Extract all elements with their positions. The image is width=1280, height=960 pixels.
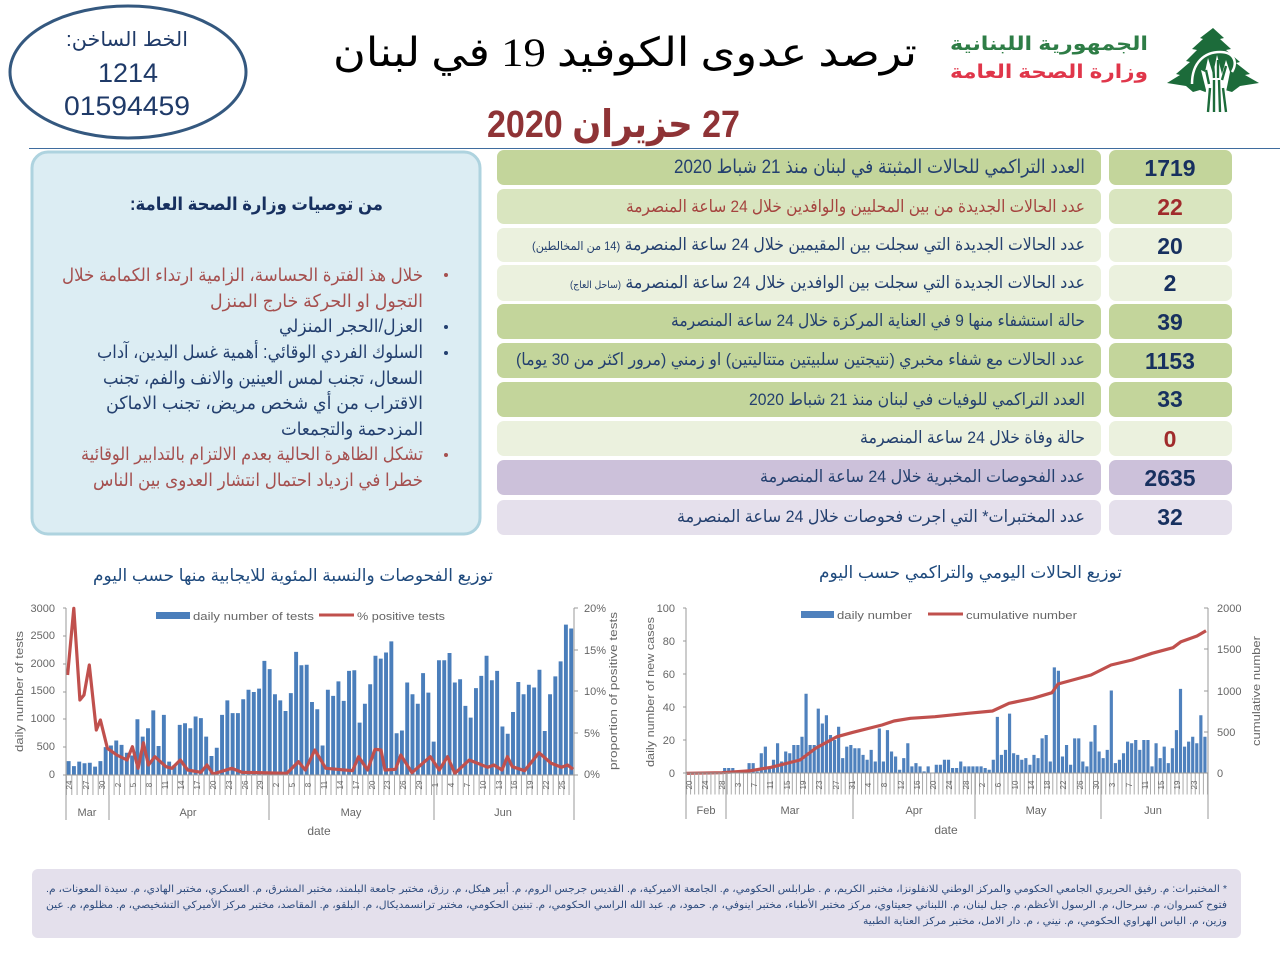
row: laboratories: عدد المختبرات* التي اجرت فحوصات خلال 24 ساعة المنصرمة [677, 507, 1085, 527]
left axis labels: 20 [663, 735, 675, 747]
recommendations heading: من توصيات وزارة الصحة العامة: [130, 194, 383, 215]
row: hospitalised [497, 304, 1232, 339]
row: new cases among arrivals: عدد الحالات الجديدة التي سجلت بين الوافدين خلال 24 ساعة المنصرمة (ساحل العاج) [570, 273, 1085, 293]
left axis labels: 100 [657, 603, 675, 615]
date labels: 11 [766, 780, 775, 789]
chart: daily tests and percent positive [14, 603, 620, 838]
left chart title: توزيع الفحوصات والنسبة المئوية للايجابية منها حسب اليوم [93, 566, 493, 586]
bullet list: المزدحمة والتجمعات [281, 419, 423, 440]
date labels: 26 [399, 780, 408, 789]
date labels: 2 [272, 782, 281, 787]
date labels: 22 [542, 780, 551, 789]
row: new cases [497, 189, 1232, 224]
row: cumulative deaths: 33 [1157, 386, 1183, 412]
bullet list: السلوك الفردي الوقائي: أهمية غسل اليدين، آداب [97, 340, 423, 363]
row: recovered: عدد الحالات مع شفاء مخبري (نتيجتين سلبيتين متتاليتين) او زمني (مرور اكثر من 30 يوما) [516, 350, 1085, 370]
left axis labels: 3000 [31, 603, 55, 615]
title: ترصد عدوى الكوفيد 19 في لبنان [333, 30, 917, 76]
row: new cases among arrivals: 2 [1164, 270, 1176, 296]
left axis labels: 2500 [31, 630, 55, 642]
month labels: Feb [697, 805, 715, 817]
axis title: proportion of positive tests: proportion of positive tests [608, 611, 620, 770]
date labels: 14 [177, 780, 186, 789]
right axis labels: 10% [584, 686, 606, 698]
date labels: 3 [1108, 782, 1117, 787]
bullet list: خطرا في ازدياد احتمال انتشار العدوى بين الناس [93, 470, 423, 491]
left axis labels: 60 [663, 669, 675, 681]
row: new cases among residents: 20 [1157, 233, 1183, 259]
date labels: 19 [1173, 780, 1182, 789]
legend: daily number [837, 610, 912, 622]
date labels: 5 [288, 782, 297, 787]
date labels: 22 [1059, 780, 1068, 789]
date labels: 25 [558, 780, 567, 789]
hotline ellipse [10, 6, 246, 138]
date labels: 26 [1076, 780, 1085, 789]
header rule [29, 148, 1280, 150]
date labels: 7 [1125, 782, 1134, 787]
row: cumulative cases [497, 150, 1232, 185]
right axis labels: 1500 [1217, 644, 1241, 656]
date labels: 2 [978, 782, 987, 787]
legend: cumulative number [966, 610, 1077, 622]
date labels: 31 [848, 780, 857, 789]
row: cumulative cases: العدد التراكمي للحالات المثبتة في لبنان منذ 21 شباط 2020 [674, 157, 1085, 178]
date labels: 18 [1043, 780, 1052, 789]
date labels: 12 [897, 780, 906, 789]
bullet list: تشكل الظاهرة الحالية بعدم الالتزام بالتدابير الوقائية [81, 444, 423, 465]
legend [801, 610, 1077, 622]
bullet list: السعال، تجنب لمس العينين والانف والفم، تجنب [103, 368, 423, 389]
right axis labels: 1000 [1217, 686, 1241, 698]
date labels: 24 [65, 780, 74, 789]
bars: daily number of cases [725, 667, 1205, 773]
legend [156, 611, 446, 623]
date labels: 29 [256, 780, 265, 789]
bars: daily number of tests [69, 625, 571, 775]
right axis labels [1217, 603, 1241, 780]
row: cumulative deaths [497, 382, 1232, 417]
date labels: 27 [82, 780, 91, 789]
date labels: 20 [368, 780, 377, 789]
month labels: May [1026, 805, 1047, 817]
date labels: 7 [463, 782, 472, 787]
panel: laboratories footnote: وزين، م. الياس الهراوي الحكومي، م. نيني ، م. دار الامل، مختبر مركز العناية الطبية [863, 916, 1227, 927]
date labels: 11 [1141, 780, 1150, 789]
date labels: 13 [495, 780, 504, 789]
bullet list: التجول او الحركة خارج المنزل [210, 291, 423, 312]
bullet list: العزل/الحجر المنزلي [279, 316, 423, 337]
date labels: 23 [815, 780, 824, 789]
row: hospitalised: 39 [1157, 309, 1183, 335]
date labels: 14 [1027, 780, 1036, 789]
date labels: 29 [415, 780, 424, 789]
row: new cases among arrivals [497, 265, 1232, 301]
row: deaths last 24h: حالة وفاة خلال 24 ساعة المنصرمة [860, 428, 1085, 447]
date heading: 27 حزيران 2020 [487, 104, 740, 146]
date labels: 20 [929, 780, 938, 789]
left axis labels: 1000 [31, 713, 55, 725]
row: new cases: 22 [1157, 194, 1183, 220]
date labels: 23 [225, 780, 234, 789]
left axis labels: 2000 [31, 658, 55, 670]
date labels: 4 [864, 782, 873, 787]
date labels: 23 [383, 780, 392, 789]
row: recovered: 1153 [1145, 348, 1195, 374]
date labels [685, 780, 1199, 789]
right axis labels [584, 603, 606, 781]
row: lab tests: 2635 [1144, 465, 1196, 491]
right axis labels: 0% [584, 769, 600, 781]
date labels: 15 [1157, 780, 1166, 789]
ministry name [950, 34, 1148, 83]
row: lab tests [497, 460, 1232, 495]
month labels [78, 807, 512, 819]
left axis labels: 0 [49, 769, 55, 781]
date labels: 20 [685, 780, 694, 789]
date labels: 26 [241, 780, 250, 789]
left axis labels: 80 [663, 636, 675, 648]
axis title: daily number of new cases: daily number of new cases [645, 616, 657, 767]
month labels: Jun [494, 807, 512, 819]
month labels: Apr [179, 807, 197, 819]
right axis labels: 15% [584, 645, 606, 657]
date labels: 30 [98, 780, 107, 789]
right axis labels: 2000 [1217, 603, 1241, 615]
bullet list: خلال هذ الفترة الحساسة، الزامية ارتداء الكمامة خلال [62, 265, 423, 286]
month labels: Apr [905, 805, 923, 817]
right axis labels: 5% [584, 728, 600, 740]
row: deaths last 24h [497, 421, 1232, 456]
date labels: 10 [1011, 780, 1020, 789]
date labels: 8 [304, 782, 313, 787]
panel: statistics table [497, 150, 1232, 535]
month labels: Jun [1144, 805, 1162, 817]
legend: daily number of tests [193, 611, 315, 623]
panel: laboratories footnote: * المختبرات: م. رفيق الحريري الجامعي الحكومي والمركز الوطني للانفلونزا، مختبر الكريم، م . طرابلس الحكومي، م. الجامعة الاميركية، م. القديس جرجس الروم، م. أبير هيكل، م. رزق، مختبر جامعة البلمند، مختبر المشرق، م. العسكري، مختبر الهادي، م. سيدة المعونات، م. [46, 882, 1227, 895]
date labels: 24 [701, 780, 710, 789]
axes [63, 608, 578, 820]
row: hospitalised: حالة استشفاء منها 9 في العناية المركزة خلال 24 ساعة المنصرمة [671, 311, 1085, 331]
row: recovered [497, 343, 1232, 378]
month labels: May [341, 807, 362, 819]
panel: recommendations [32, 152, 480, 534]
line: cumulative number [686, 631, 1206, 773]
date labels: 24 [945, 780, 954, 789]
date labels: 10 [479, 780, 488, 789]
row: lab tests: عدد الفحوصات المخبرية خلال 24 ساعة المنصرمة [760, 467, 1085, 486]
bullet list [62, 265, 448, 491]
hotline ellipse: الخط الساخن: [66, 29, 188, 51]
date labels: 19 [799, 780, 808, 789]
left axis labels [31, 603, 55, 781]
right axis labels: 20% [584, 603, 606, 615]
row: cumulative deaths: العدد التراكمي للوفيات في لبنان منذ 21 شباط 2020 [749, 390, 1085, 410]
row: laboratories [497, 500, 1232, 535]
row: new cases among residents: عدد الحالات الجديدة التي سجلت بين المقيمين خلال 24 ساعة المنصرمة (14 من المخالطين) [532, 235, 1085, 255]
left axis labels: 500 [37, 741, 55, 753]
line: percent positive [68, 608, 573, 774]
row: cumulative cases: 1719 [1144, 155, 1196, 181]
month labels: Mar [78, 807, 97, 819]
date labels [65, 780, 567, 789]
date labels: 19 [526, 780, 535, 789]
date labels: 8 [880, 782, 889, 787]
ministry name: وزارة الصحة العامة [950, 62, 1148, 83]
date labels: 6 [994, 782, 1003, 787]
date labels: 28 [962, 780, 971, 789]
axis title: cumulative number: cumulative number [1251, 636, 1263, 746]
hotline ellipse: 01594459 [64, 91, 190, 121]
month labels: Mar [781, 805, 800, 817]
panel: laboratories footnote: فتوح كسروان، م. سرحال، م. الرسول الأعظم، م. جبل لبنان، م. اللبناني جعيتاوي، مركز مختبر الأطباء، مختبر اينوفي، م. حمود، م. عبد الله الراسي الحكومي، م. تبنين الحكومي، مختبر ترانسمديكال، م. البلقو، م. المقاصد، مختبر مركز الأميركي التشخيصي، م. مظلوم، م. عين [46, 898, 1227, 911]
row: deaths last 24h: 0 [1164, 426, 1176, 452]
date labels: 30 [1092, 780, 1101, 789]
date labels: 14 [336, 780, 345, 789]
left axis labels: 0 [669, 768, 675, 780]
x axis title: date [934, 823, 958, 837]
date labels: 8 [145, 782, 154, 787]
x axis title: date [307, 824, 331, 838]
date labels: 20 [209, 780, 218, 789]
bullet list: الاقتراب من أي شخص مريض، تجنب الاماكن [106, 391, 423, 414]
date labels: 5 [129, 782, 138, 787]
month labels [697, 805, 1162, 817]
date labels: 23 [1190, 780, 1199, 789]
left axis labels: 40 [663, 702, 675, 714]
date labels: 17 [193, 780, 202, 789]
row: new cases among residents [497, 228, 1232, 262]
left axis labels: 1500 [31, 685, 55, 697]
date labels: 1 [431, 782, 440, 787]
date labels: 3 [734, 782, 743, 787]
right axis labels: 0 [1217, 768, 1223, 780]
icon: cedar tree logo [1167, 28, 1259, 112]
date labels: 15 [783, 780, 792, 789]
legend: % positive tests [357, 611, 446, 623]
date labels: 27 [832, 780, 841, 789]
date labels: 4 [447, 782, 456, 787]
axis title: daily number of tests: daily number of tests [14, 630, 26, 752]
date labels: 11 [320, 780, 329, 789]
hotline ellipse: 1214 [98, 58, 158, 88]
date labels: 28 [718, 780, 727, 789]
date labels: 2 [114, 782, 123, 787]
date labels: 11 [161, 780, 170, 789]
chart: daily and cumulative cases [645, 603, 1263, 837]
right chart title: توزيع الحالات اليومي والتراكمي حسب اليوم [819, 563, 1122, 583]
row: new cases: عدد الحالات الجديدة من بين المحليين والوافدين خلال 24 ساعة المنصرمة [626, 197, 1085, 216]
date labels: 17 [352, 780, 361, 789]
row: laboratories: 32 [1157, 504, 1183, 530]
right axis labels: 500 [1217, 727, 1235, 739]
left axis labels [657, 603, 675, 780]
date labels: 7 [750, 782, 759, 787]
axes [683, 608, 1208, 819]
ministry name: الجمهورية اللبنانية [950, 34, 1148, 55]
date labels: 16 [913, 780, 922, 789]
panel: laboratories footnote [32, 869, 1241, 938]
date labels: 16 [510, 780, 519, 789]
